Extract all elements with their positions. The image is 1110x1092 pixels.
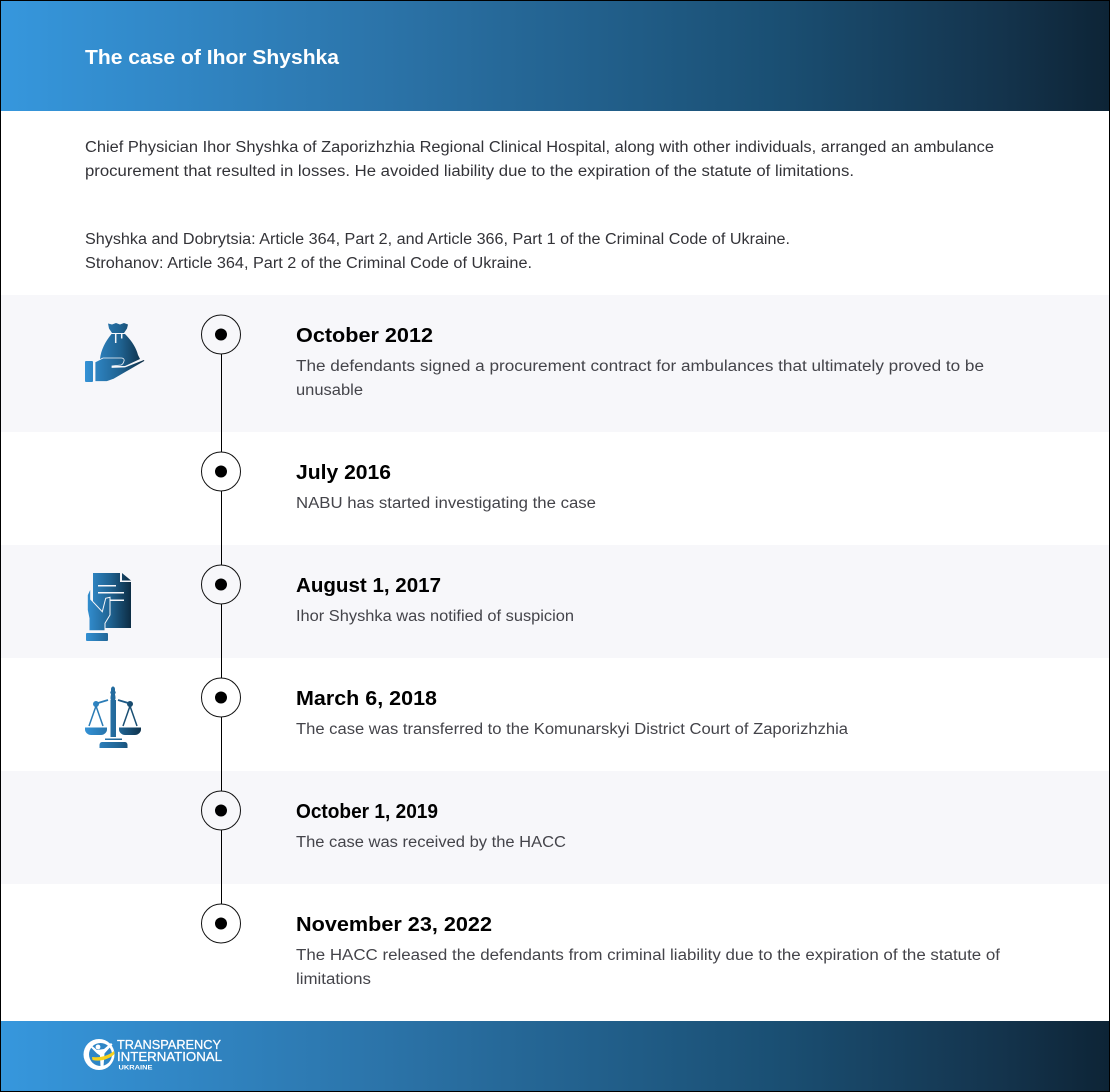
timeline entry: October 2012: October 2012 (296, 325, 433, 347)
text block: case summary: procurement that resulted in losses. He avoided liability due to the expiration of the statute of limitations. (85, 163, 854, 180)
timeline entry: March 6, 2018: March 6, 2018 (296, 688, 437, 710)
panel: header banner (1, 1, 1109, 111)
timeline entry: March 6, 2018: The case was transferred to the Komunarskyi District Court of Zaporizhzhia (296, 721, 848, 738)
text block: criminal code articles: Shyshka and Dobrytsia: Article 364, Part 2, and Article 366, Part 1 of the Criminal Code of Ukraine. (85, 231, 790, 248)
timeline entry: August 1, 2017: August 1, 2017 (296, 575, 441, 597)
icon: scales of justice (85, 686, 141, 748)
timeline entry: October 2012 (296, 325, 984, 399)
timeline entry: November 23, 2022: limitations (296, 971, 371, 988)
panel: row backgrounds (1, 295, 1109, 884)
timeline entry: August 1, 2017 (296, 575, 574, 625)
timeline entry: October 1, 2019: The case was received by the HACC (296, 834, 566, 851)
icon: document in hand (86, 573, 131, 641)
timeline entry: October 1, 2019: October 1, 2019 (296, 801, 438, 823)
timeline entry: November 23, 2022 (296, 914, 1001, 988)
logo: Transparency International Ukraine: INTERNATIONAL (117, 1050, 222, 1064)
timeline entry: October 1, 2019 (296, 801, 566, 851)
icon: money bag in hand (85, 323, 145, 382)
timeline entry: July 2016 (296, 462, 596, 512)
logo: Transparency International Ukraine: TRANSPARENCY (117, 1038, 222, 1052)
title: The case of Ihor Shyshka (85, 47, 340, 69)
text block: case summary: Chief Physician Ihor Shyshka of Zaporizhzhia Regional Clinical Hospital, along with other individuals, arranged an ambulance (85, 139, 994, 156)
timeline entry: July 2016: July 2016 (296, 462, 391, 484)
text block: case summary (85, 139, 994, 180)
timeline entry: August 1, 2017: Ihor Shyshka was notified of suspicion (296, 608, 574, 625)
logo: Transparency International Ukraine: UKRAINE (118, 1064, 153, 1072)
logo: Transparency International Ukraine (84, 1038, 222, 1072)
panel: footer banner (1, 1021, 1109, 1091)
timeline markers (202, 315, 240, 943)
timeline entry: November 23, 2022: The HACC released the defendants from criminal liability due to the expiration of the statute of (296, 947, 1001, 964)
timeline entry: March 6, 2018 (296, 688, 848, 738)
text block: criminal code articles (85, 231, 790, 272)
timeline entry: November 23, 2022: November 23, 2022 (296, 914, 492, 936)
timeline entry: October 2012: The defendants signed a procurement contract for ambulances that ultimately proved to be (296, 358, 984, 375)
timeline entry: July 2016: NABU has started investigating the case (296, 495, 596, 512)
timeline entry: October 2012: unusable (296, 382, 363, 399)
timeline line (220, 334, 222, 923)
text block: criminal code articles: Strohanov: Article 364, Part 2 of the Criminal Code of Ukraine. (85, 255, 532, 272)
